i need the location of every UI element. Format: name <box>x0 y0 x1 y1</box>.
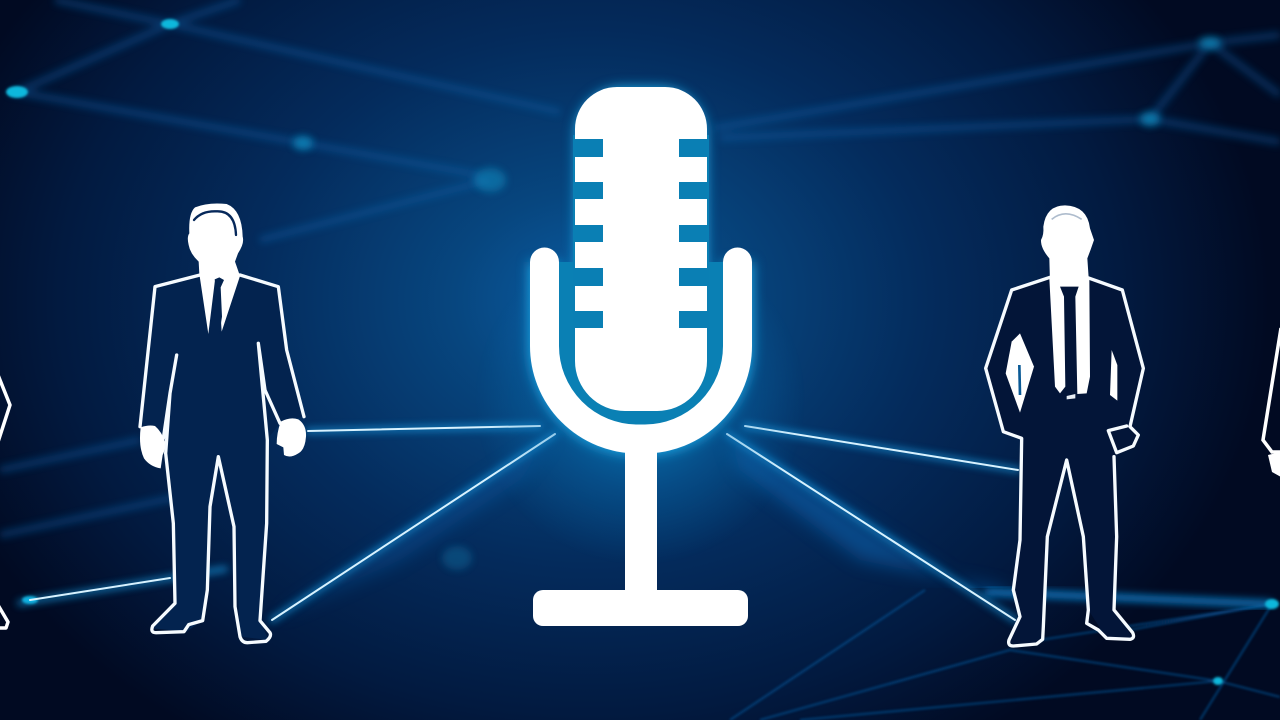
head and hair <box>188 203 243 334</box>
fan glow behind left link <box>272 434 555 620</box>
icon: microphone <box>533 87 748 626</box>
right hand <box>277 418 306 456</box>
pocket <box>1110 350 1117 401</box>
head and neck <box>1041 205 1094 287</box>
suit outline <box>986 277 1143 646</box>
fan glow behind right link <box>730 444 1010 588</box>
stem <box>625 450 657 595</box>
folder slit <box>1015 365 1024 395</box>
belt buckle <box>1067 394 1075 399</box>
suit body fill <box>985 277 1143 645</box>
figure: right man <box>985 205 1143 646</box>
hair highlight <box>1052 214 1082 219</box>
teal recess between capsule and yoke <box>559 262 723 425</box>
suit body fill <box>140 275 303 640</box>
folder <box>1006 333 1034 413</box>
capsule with slots <box>575 87 707 411</box>
hair gap <box>194 211 236 235</box>
yoke <box>544 262 738 439</box>
microphone halo <box>544 87 738 439</box>
tie <box>209 277 224 334</box>
figure: left man <box>140 203 306 643</box>
figure: cropped right man <box>1263 328 1280 477</box>
microphone glow <box>475 235 805 565</box>
bright link lines from microphone to people <box>20 426 1018 620</box>
figure: cropped left man <box>0 375 10 628</box>
base <box>533 590 748 626</box>
glowing band at lower right <box>985 592 1272 604</box>
shirt <box>1049 278 1090 394</box>
suit outline <box>140 275 304 643</box>
left hand <box>140 426 165 468</box>
slot backing <box>573 135 709 332</box>
